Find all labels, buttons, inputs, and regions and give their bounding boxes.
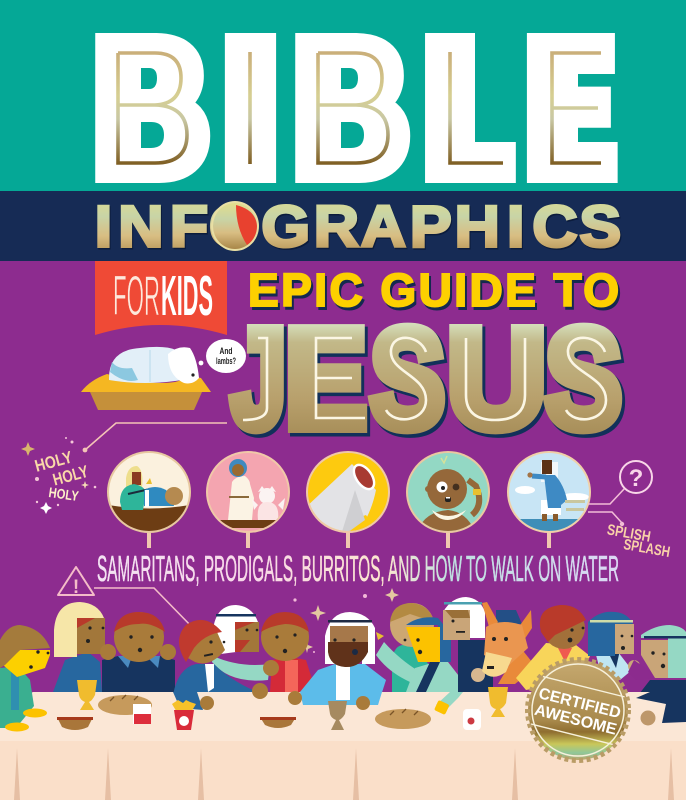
icon row: five story medallions: [105, 450, 595, 548]
badge: certified awesome seal: AWESOME: [533, 702, 619, 739]
callout: holy holy holy: HOLY: [51, 462, 91, 490]
table items: food and goblets: [57, 680, 508, 730]
title: JESUS: J: [234, 305, 288, 459]
callout: question mark and splish splash: [588, 461, 671, 561]
sheep head: [168, 347, 199, 383]
figure: central apostle leaning back: [173, 620, 279, 710]
title: INFOGRAPHICS: INFOGRAPHICS: [95, 194, 621, 259]
illustration: last supper figures: [53, 597, 686, 723]
figure: red-haired apostle in yellow: [516, 605, 590, 690]
callout: warning triangle: [58, 567, 197, 632]
title: BIBLE: B: [93, 3, 209, 214]
title: INFOGRAPHICS: INFOGRAPHICS: [96, 195, 622, 260]
red and white drink: [133, 704, 151, 724]
sheep body: [109, 347, 182, 383]
thought bubble: and lambs: And: [220, 346, 232, 356]
figure: blonde apostle: [53, 602, 105, 692]
title: JESUS: U: [448, 302, 545, 455]
medallion: confused baby: [405, 450, 495, 548]
figure: white headdress apostle: [213, 605, 259, 655]
callout: question mark and splish splash: SPLASH: [622, 536, 671, 561]
white cup: [463, 709, 481, 730]
figure: apostle far right: [628, 625, 686, 723]
bowl left: [57, 717, 93, 730]
subtitle: Epic Guide To: EPIC GUIDE TO: [248, 264, 619, 316]
figure: red-haired apostle with raised hands: [100, 612, 176, 692]
title: JESUS: E: [288, 305, 368, 459]
badge: certified awesome seal: [528, 660, 628, 760]
figure: red-shirted apostle: [261, 612, 316, 692]
title: JESUS: [232, 301, 623, 459]
figure: apostle far left leaning on table: [0, 625, 50, 732]
manger box: [90, 392, 202, 410]
thought bubble: and lambs: lambs?: [216, 356, 236, 366]
medallion: prodigal son: [205, 450, 295, 548]
callout: warning triangle: !: [73, 577, 79, 598]
figure: apostle behind donkey: [443, 597, 493, 692]
title: JESUS: E: [286, 302, 366, 456]
title: JESUS: S: [546, 301, 621, 456]
title: JESUS: J: [232, 302, 286, 456]
figure: apostle behind with teal sleeve: [376, 603, 435, 692]
callout: holy holy holy: HOLY: [33, 447, 75, 476]
white inline strokes: [243, 338, 606, 420]
title: JESUS: S: [374, 305, 446, 459]
callout: question mark and splish splash: SPLISH: [606, 521, 652, 546]
title: BIBLE: E: [525, 2, 616, 213]
table: banquet table with cloth: [0, 692, 686, 800]
gold goblet right: [488, 687, 508, 717]
medallion: burrito: [305, 450, 395, 548]
letter B counters: [125, 50, 380, 165]
bread right: [375, 709, 431, 729]
decorative stars: [293, 588, 399, 653]
title: JESUS: U: [450, 305, 548, 458]
figure: Jesus: [300, 612, 386, 705]
subtitle: Epic Guide To: EPIC GUIDE TO: [250, 267, 621, 319]
thought bubble: and lambs: [199, 339, 246, 373]
medallion: good samaritan: [105, 450, 195, 548]
figure: donkey: [482, 602, 536, 684]
medallion: walking on water: [505, 450, 595, 548]
title: JESUS: S: [548, 304, 623, 459]
gold goblet left: [77, 680, 97, 710]
bowl centre: [260, 717, 296, 728]
callout: question mark and splish splash: ?: [629, 465, 643, 492]
band: teal title band: [0, 0, 686, 191]
brown goblet: [328, 701, 347, 730]
callout: holy holy holy: HOLY: [48, 484, 80, 504]
text: KIDS: [161, 264, 213, 328]
band: navy infographics band: [0, 191, 686, 261]
title: BIBLE: [95, 33, 618, 183]
callout: holy holy holy: [21, 423, 227, 514]
illustration: lamb in manger: [81, 339, 246, 410]
title: JESUS: S: [371, 302, 444, 456]
straw back: [81, 374, 211, 392]
fries: [172, 700, 196, 730]
figure: apostle in blue headdress, right: [588, 612, 640, 680]
bread left: [98, 695, 152, 715]
badge: certified awesome seal: CERTIFIED: [537, 685, 622, 722]
banner: For Kids: FOR: [113, 264, 160, 328]
title: BIBLE: I: [222, 1, 279, 213]
figure overlaps: sleeves and hands on table: [173, 683, 686, 726]
figure: yellow-faced apostle in blue headdress: [404, 617, 463, 692]
icon: pie chart letter O: [211, 201, 259, 251]
title: BIBLE: B: [293, 3, 409, 214]
title: BIBLE: L: [423, 2, 513, 213]
